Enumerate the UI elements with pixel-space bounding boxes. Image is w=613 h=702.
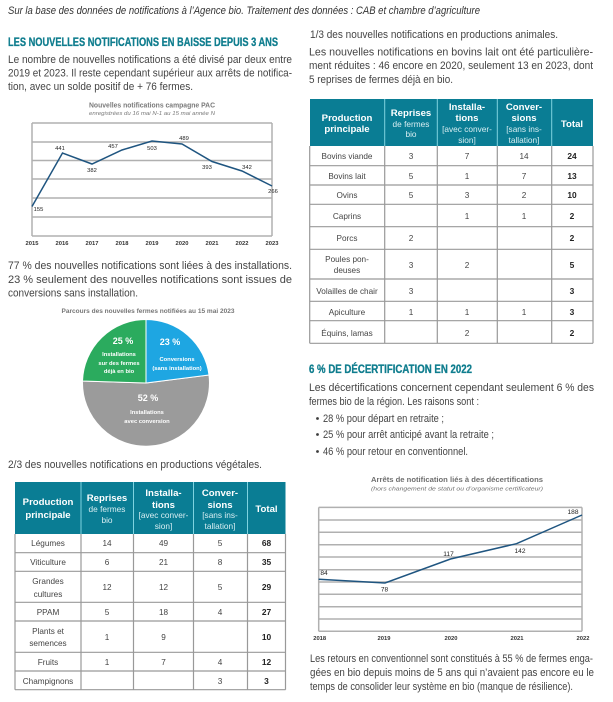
table rows: 1 <box>465 172 470 181</box>
table rows: 49 <box>159 539 168 548</box>
table rows: Grandes <box>32 577 64 586</box>
table rows: 1 <box>465 212 470 221</box>
heading: décertification: 6 % DE DÉCERTIFICATION EN 2022 <box>309 363 472 376</box>
slice labels: sur des fermes <box>98 361 140 367</box>
table rows: 6 <box>105 558 110 567</box>
text block: installations: conversions sans installation. <box>8 288 138 300</box>
table rows: 2 <box>465 329 470 338</box>
data labels: 393 <box>202 165 212 171</box>
table rows: 13 <box>567 171 577 181</box>
chart title: Nouvelles notifications campagne PAC <box>89 100 215 110</box>
slice labels: Conversions <box>159 357 195 363</box>
table rows: 3 <box>218 677 223 686</box>
table rows: 3 <box>409 261 414 270</box>
text block: bovins lait: 5 reprises de fermes déjà en bio. <box>309 74 453 86</box>
table header: Total <box>561 119 583 130</box>
year axis <box>313 636 589 642</box>
table header: Total <box>255 504 278 515</box>
table rows: 68 <box>262 538 271 548</box>
table header: [sans ins- <box>506 124 542 134</box>
data labels <box>34 136 278 213</box>
table rows: 8 <box>218 558 223 567</box>
slice labels: 25 % <box>113 336 133 346</box>
table rows: Apiculture <box>329 308 366 317</box>
year axis: 2015 <box>26 241 39 247</box>
table rows: 1 <box>409 308 414 317</box>
table header: de fermes <box>393 119 429 129</box>
table: productions végétales <box>15 482 286 690</box>
table rows: deuses <box>334 266 360 275</box>
table rows: 3 <box>465 191 470 200</box>
table rows: 5 <box>218 583 223 592</box>
table header: tions <box>456 113 478 124</box>
text block: décertifications <box>309 382 594 408</box>
text block: décertifications: Les décertifications concernent cependant seulement 6 % des <box>309 382 594 394</box>
table rows: 12 <box>102 583 112 592</box>
table rows: Ovins <box>337 191 357 200</box>
year axis: 2020 <box>445 636 457 642</box>
table rows: Volailles de chair <box>316 287 378 296</box>
table rows: Bovins lait <box>328 172 366 181</box>
table header: principale <box>324 124 370 135</box>
table rows: 7 <box>465 152 470 161</box>
bullet list: raisons: 46 % pour retour en conventionnel. <box>323 446 468 458</box>
year axis: 2023 <box>266 241 279 247</box>
table header: [avec conver- <box>139 510 189 520</box>
year axis: 2018 <box>116 241 129 247</box>
table rows: 2 <box>522 191 527 200</box>
table rows: Viticulture <box>30 558 66 567</box>
data labels: 84 <box>320 570 328 577</box>
table rows: 1 <box>522 308 527 317</box>
chart subtitle: (hors changement de statut ou d’organisme certificateur) <box>371 486 543 492</box>
table rows: 5 <box>218 539 223 548</box>
table header: Conver- <box>202 488 238 499</box>
table header: [sans ins- <box>202 510 238 520</box>
table rows: Équins, lamas <box>321 328 373 338</box>
data labels: 382 <box>87 168 97 174</box>
chart title: Arrêts de notification liés à des décertifications <box>371 477 543 484</box>
table rows <box>316 151 577 338</box>
data labels: 188 <box>567 509 579 516</box>
text block: intro <box>8 54 292 93</box>
year axis: 2019 <box>378 636 391 642</box>
pie chart: parcours <box>62 308 235 446</box>
slice labels <box>98 336 202 425</box>
text block: intro: tion, avec un solde positif de + 76 fermes. <box>8 81 193 93</box>
table rows <box>23 538 271 686</box>
slice labels: Installations <box>130 410 164 416</box>
table rows: Caprins <box>333 212 361 221</box>
data labels: 142 <box>514 548 526 555</box>
table rows: 3 <box>409 152 414 161</box>
text block: retours en conventionnel: gées en bio depuis moins de 5 ans qui n’avaient pas encore eu le <box>310 667 594 679</box>
table header: Production <box>23 497 73 508</box>
table rows: 29 <box>262 582 271 592</box>
heading: nouvelles notifications: LES NOUVELLES NOTIFICATIONS EN BAISSE DEPUIS 3 ANS <box>8 37 278 49</box>
table header: sion] <box>155 521 172 531</box>
table rows: Plants et <box>32 627 65 636</box>
data labels: 342 <box>242 165 252 171</box>
text block: installations: 77 % des nouvelles notifications sont liées à des installations. <box>8 260 292 272</box>
year axis: 2021 <box>511 636 524 642</box>
table rows: 9 <box>161 633 166 642</box>
table header: de fermes <box>89 504 125 514</box>
table header: [avec conver- <box>442 124 492 134</box>
table rows: 4 <box>218 658 223 667</box>
slice: 25 % <box>82 320 146 383</box>
year axis: 2019 <box>146 241 159 247</box>
table rows: 1 <box>522 212 527 221</box>
table rows: 14 <box>102 539 112 548</box>
table rows: Champignons <box>23 677 73 686</box>
table header: Installa- <box>145 488 182 499</box>
table header: Installa- <box>449 102 485 113</box>
data line <box>32 141 272 206</box>
slice labels: 23 % <box>160 337 180 347</box>
line chart: nouvelles notifications <box>26 100 279 247</box>
table rows: 35 <box>262 557 271 567</box>
year axis: 2016 <box>56 241 69 247</box>
bullet list: raisons: 25 % pour arrêt anticipé avant la retraite ; <box>323 429 494 441</box>
text block: intro: 2019 et 2023. Il reste cependant supérieur aux arrêts de notifica- <box>8 68 292 80</box>
year axis <box>26 241 279 247</box>
slice labels: déjà en bio <box>104 369 135 375</box>
table rows: semences <box>29 639 67 648</box>
text block: bovins lait <box>309 46 593 86</box>
data labels <box>320 509 579 594</box>
table rows: 3 <box>409 287 414 296</box>
table rows: Porcs <box>337 234 357 243</box>
table header: tallation] <box>205 521 235 531</box>
data labels: 489 <box>179 136 189 142</box>
text block: intro: Le nombre de nouvelles notifications a été divisé par deux entre <box>8 54 292 66</box>
table rows: 3 <box>570 286 575 296</box>
text block: installations: 23 % seulement des nouvelles notifications sont issues de <box>8 274 292 286</box>
year axis: 2017 <box>86 241 98 247</box>
text: productions animales: 1/3 des nouvelles notifications en productions animales. <box>310 29 558 41</box>
year axis: 2021 <box>206 241 219 247</box>
table header: Reprises <box>391 108 431 119</box>
table header <box>310 99 593 146</box>
slice labels: Installations <box>102 352 136 358</box>
text block: bovins lait: Les nouvelles notifications en bovins lait ont été particulière- <box>309 46 593 58</box>
text block: décertifications: fermes bio de la région. Les raisons sont : <box>309 396 479 408</box>
text block: bovins lait: ment réduites : 46 encore en 2020, seulement 13 en 2023, dont <box>309 60 593 72</box>
table rows: 5 <box>570 260 575 270</box>
table rows: Légumes <box>31 539 65 548</box>
table rows: 1 <box>105 658 110 667</box>
table header: sions <box>207 500 233 511</box>
slice labels: (sans installation) <box>152 366 202 372</box>
slice: 23 % <box>146 320 209 383</box>
table header: sions <box>511 113 537 124</box>
slice labels: 52 % <box>138 393 158 403</box>
table rows: 5 <box>409 191 414 200</box>
table rows: 7 <box>522 172 527 181</box>
table rows: 10 <box>567 190 577 200</box>
data labels: 78 <box>381 586 388 594</box>
year axis: 2022 <box>236 241 248 247</box>
table rows: 2 <box>409 234 414 243</box>
year axis: 2022 <box>577 636 589 642</box>
slice labels: avec conversion <box>124 419 170 425</box>
table rows: 24 <box>567 151 577 161</box>
table header: sion] <box>458 135 476 145</box>
table rows: 2 <box>570 233 575 243</box>
table rows: Fruits <box>38 658 58 667</box>
table rows: 21 <box>159 558 168 567</box>
table rows: 2 <box>465 261 470 270</box>
text block: installations <box>8 260 292 300</box>
data labels: 503 <box>147 146 157 152</box>
table rows: Poules pon- <box>325 255 369 264</box>
table rows: 2 <box>570 211 575 221</box>
table header: principale <box>25 510 71 521</box>
table rows: 10 <box>262 632 271 642</box>
text: productions végétales: 2/3 des nouvelles notifications en productions végétales. <box>8 459 262 471</box>
table header: tions <box>152 500 175 511</box>
table rows: 14 <box>519 152 529 161</box>
table rows: 3 <box>264 676 269 686</box>
pie title: Parcours des nouvelles fermes notifiées au 15 mai 2023 <box>62 308 235 315</box>
data labels: 441 <box>55 146 65 152</box>
text block: retours en conventionnel: temps de consolider leur système en bio (manque de résilience). <box>310 681 573 693</box>
year axis: 2020 <box>176 241 188 247</box>
source note: Sur la base des données de notifications à l’Agence bio. Traitement des données : CAB et chambre d’agriculture <box>8 5 480 17</box>
table header <box>15 482 286 534</box>
table header: Production <box>322 113 372 124</box>
table rows: 1 <box>465 308 470 317</box>
table rows: 4 <box>218 608 223 617</box>
line chart: arrêts de notification <box>313 477 589 642</box>
table header: bio <box>101 515 113 525</box>
data labels: 266 <box>268 189 278 195</box>
table rows: 12 <box>159 583 168 592</box>
table rows: 18 <box>159 608 168 617</box>
data labels: 155 <box>34 207 43 213</box>
table rows: 7 <box>161 658 166 667</box>
bullet list: raisons: 28 % pour départ en retraite ; <box>323 413 444 425</box>
table rows: cultures <box>34 590 62 599</box>
table rows: PPAM <box>37 608 59 617</box>
table rows: 12 <box>262 657 271 667</box>
table header: Reprises <box>87 493 127 504</box>
table rows: 2 <box>570 328 575 338</box>
table rows: 5 <box>105 608 110 617</box>
table: productions animales <box>310 99 593 343</box>
table rows: 5 <box>409 172 414 181</box>
text block: retours en conventionnel <box>310 653 594 693</box>
table header: Conver- <box>506 102 542 113</box>
slice: 52 % <box>82 375 209 446</box>
table rows: Bovins viande <box>322 152 373 161</box>
table rows: 3 <box>570 307 575 317</box>
data labels: 117 <box>443 551 454 558</box>
bullet list: raisons <box>316 413 494 458</box>
chart subtitle: enregistrées du 16 mai N-1 au 15 mai année N <box>89 111 215 117</box>
table header: tallation] <box>509 135 539 145</box>
table rows: 27 <box>262 607 271 617</box>
data line <box>319 515 582 583</box>
data labels: 457 <box>108 144 118 150</box>
year axis: 2018 <box>313 636 327 642</box>
table header: bio <box>405 129 417 139</box>
table rows: 1 <box>105 633 110 642</box>
